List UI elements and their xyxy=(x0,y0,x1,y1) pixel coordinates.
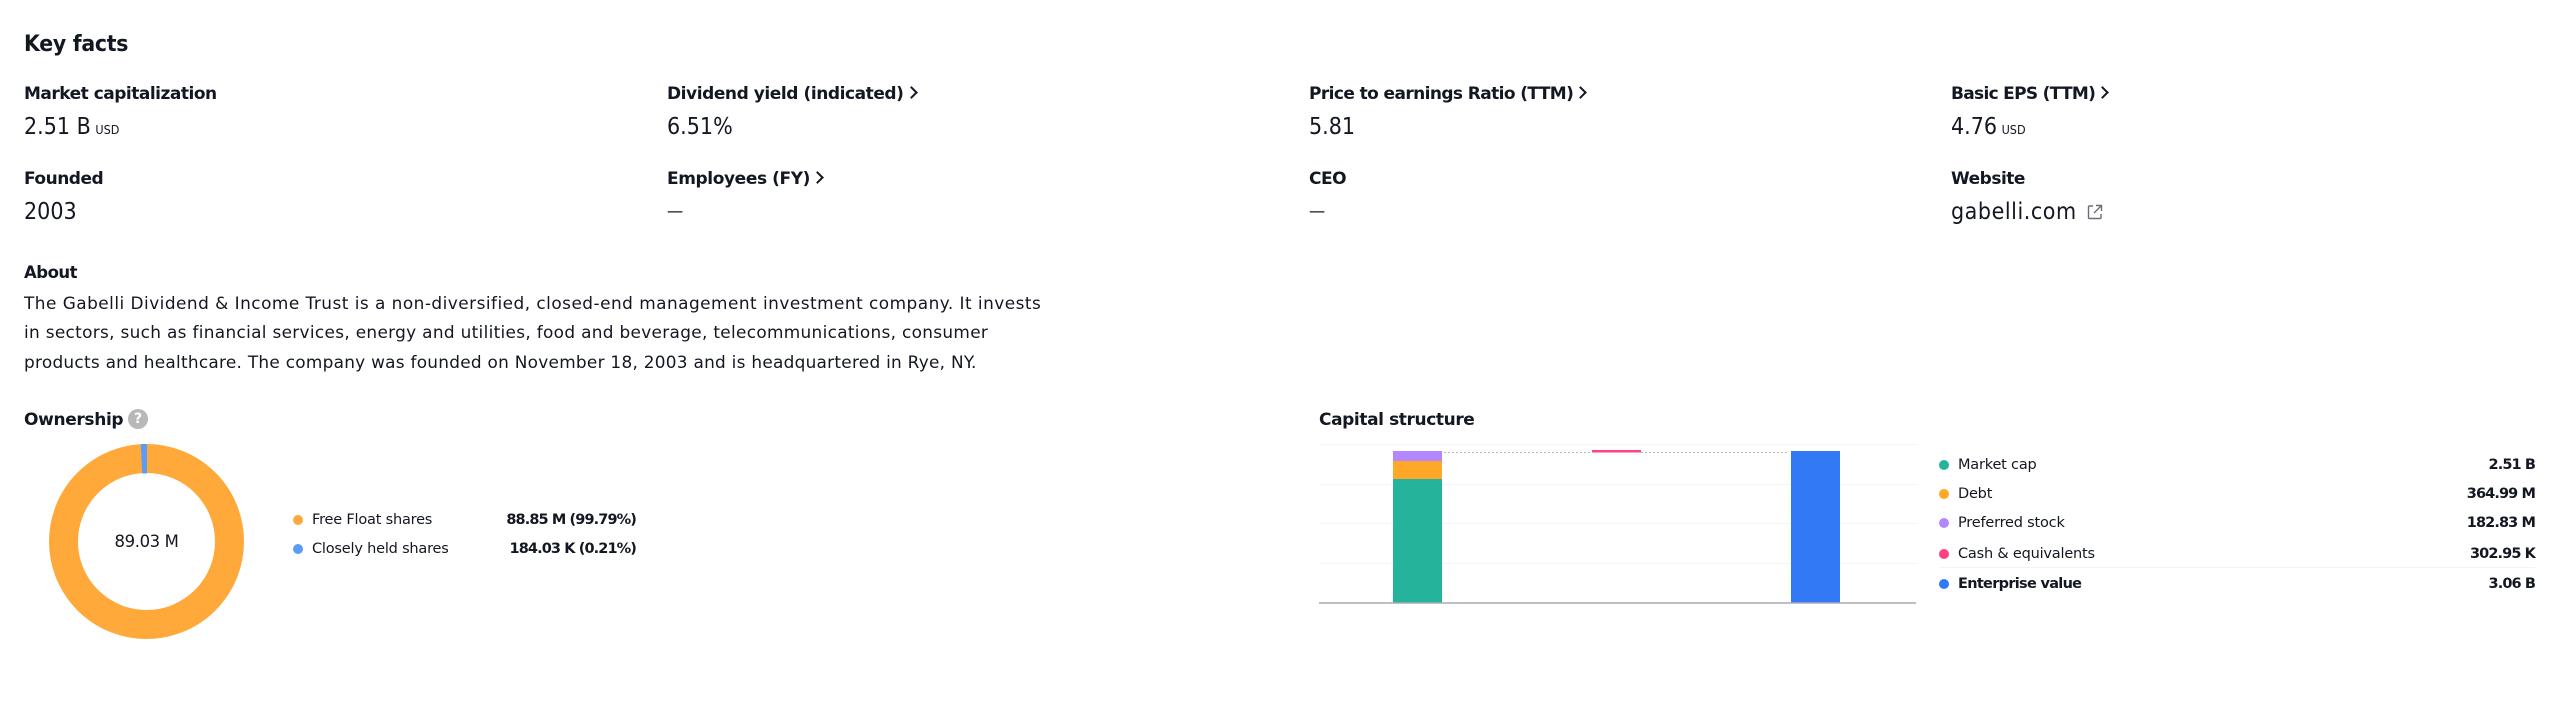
legend: capital structure xyxy=(1939,457,2536,592)
heading: Key facts: Key facts xyxy=(24,32,128,57)
fact: Founded xyxy=(24,169,103,225)
fact: Market capitalization xyxy=(24,84,217,140)
bar chart: capital structure xyxy=(1319,444,1916,604)
legend row: closely held: 184.03 K (0.21%) xyxy=(510,541,636,557)
fact: CEO xyxy=(1309,169,1346,222)
legend row: cash: Cash & equivalents xyxy=(1958,546,2095,562)
legend row: cash: 302.95 K xyxy=(2470,546,2535,562)
fact: Market capitalization: 2.51 B USD xyxy=(24,114,119,140)
icon: external link xyxy=(2088,204,2102,220)
text block: About: About xyxy=(24,263,77,282)
fact: Employees xyxy=(667,169,824,222)
fact: Basic EPS: 4.76 USD xyxy=(1951,114,2026,140)
legend row: market cap: Market cap xyxy=(1958,457,2037,473)
legend row: enterprise value: 3.06 B xyxy=(2489,576,2535,592)
fact: Basic EPS xyxy=(1951,84,2109,140)
legend row: debt: 364.99 M xyxy=(2467,486,2535,502)
icon: help: ? xyxy=(134,411,142,427)
fact: Price to earnings ratio: Price to earnings Ratio (TTM) xyxy=(1309,84,1573,104)
text block: About: products and healthcare. The company was founded on November 18, 2003 and is headquartered in Rye, NY. xyxy=(24,352,977,372)
legend row: cash xyxy=(1939,546,2536,562)
cash bar xyxy=(1592,450,1641,452)
stacked bar xyxy=(1393,451,1442,603)
fact: Price to earnings ratio xyxy=(1309,84,1587,140)
legend row: debt: Debt xyxy=(1958,486,1992,502)
fact: Employees: — xyxy=(667,201,683,222)
legend row: closely held xyxy=(293,541,636,557)
legend row: free float: 88.85 M (99.79%) xyxy=(506,512,636,528)
fact: Founded: Founded xyxy=(24,169,103,189)
legend row: free float xyxy=(293,512,636,528)
legend row: market cap xyxy=(1939,457,2535,473)
icon: help xyxy=(128,409,148,429)
fact: Dividend yield xyxy=(667,84,918,140)
legend row: closely held: Closely held shares xyxy=(312,541,449,557)
fact: Employees: Employees (FY) xyxy=(667,169,810,189)
legend row: enterprise value xyxy=(1939,576,2535,592)
enterprise value bar xyxy=(1791,451,1840,603)
fact: Founded: 2003 xyxy=(24,199,77,225)
fact: Price to earnings ratio: 5.81 xyxy=(1309,114,1355,140)
heading: Ownership: Ownership xyxy=(24,410,123,430)
fact: CEO: — xyxy=(1309,201,1325,222)
text block: About: The Gabelli Dividend & Income Trust is a non-diversified, closed-end management investment company. It invests xyxy=(24,293,1041,313)
fact: Dividend yield: Dividend yield (indicated) xyxy=(667,84,904,104)
text block: About: in sectors, such as financial services, energy and utilities, food and beverage, telecommunications, consumer xyxy=(24,322,988,342)
legend row: preferred stock xyxy=(1939,515,2535,531)
fact: Dividend yield: 6.51% xyxy=(667,114,733,140)
donut centre total: 89.03 M xyxy=(115,532,178,551)
fact: Market capitalization: Market capitalization xyxy=(24,84,217,104)
fact: CEO: CEO xyxy=(1309,169,1346,189)
fact: Basic EPS: Basic EPS (TTM) xyxy=(1951,84,2095,104)
fact: Website xyxy=(1951,169,2102,225)
text block: About xyxy=(24,263,1041,372)
legend: ownership xyxy=(293,512,636,557)
legend row: enterprise value: Enterprise value xyxy=(1958,576,2081,592)
legend row: debt xyxy=(1939,486,2535,502)
legend row: market cap: 2.51 B xyxy=(2489,457,2535,473)
fact: Website: gabelli.com xyxy=(1951,199,2077,225)
heading: Capital structure: Capital structure xyxy=(1319,410,1474,430)
legend row: preferred stock: 182.83 M xyxy=(2467,515,2535,531)
fact: Website: Website xyxy=(1951,169,2025,189)
donut chart: ownership xyxy=(49,444,244,639)
legend row: free float: Free Float shares xyxy=(312,512,432,528)
legend row: preferred stock: Preferred stock xyxy=(1958,515,2065,531)
